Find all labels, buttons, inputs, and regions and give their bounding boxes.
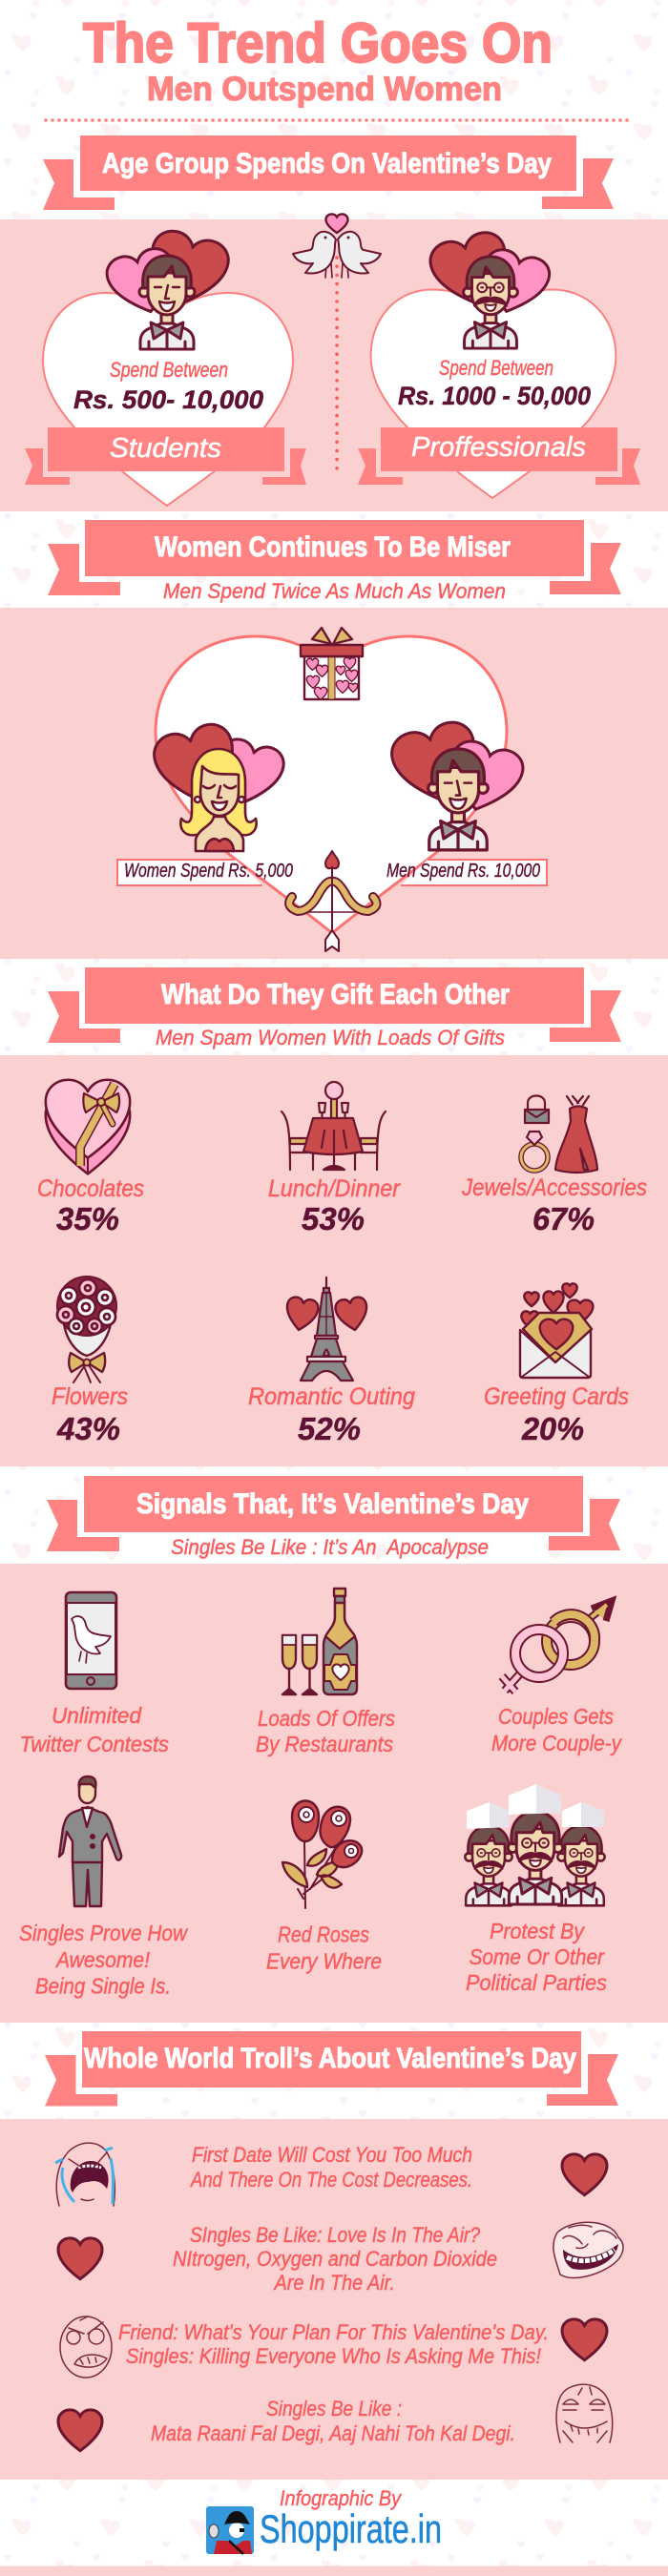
icon: bow and arrow xyxy=(289,851,377,951)
banner: gifts: What Do They Gift Each Other xyxy=(161,979,510,1010)
text: Friend: What's Your Plan For This Valentine's Day. xyxy=(118,2320,549,2344)
banner: gifts: Men Spam Women With Loads Of Gifts xyxy=(156,1026,505,1049)
banner: signals: Signals That, It’s Valentine’s Day xyxy=(136,1488,529,1520)
ribbon xyxy=(25,427,306,485)
joke 4 xyxy=(58,2384,613,2451)
big heart xyxy=(156,636,507,933)
caption: Protest By xyxy=(490,1919,585,1943)
joke 3 xyxy=(60,2316,607,2378)
banner: women miser: Men Spend Twice As Much As Women xyxy=(163,579,506,603)
value: 20% xyxy=(521,1411,584,1446)
text: And There On The Cost Decreases. xyxy=(189,2168,472,2192)
caption: Every Where xyxy=(266,1948,382,1973)
text xyxy=(189,2143,472,2192)
icon: young man with balloons xyxy=(103,226,233,349)
icon: three protesters xyxy=(465,1784,605,1905)
logo wordmark: Shoppirate.in xyxy=(260,2506,442,2551)
caption xyxy=(19,1703,169,1756)
panel: gifts xyxy=(0,1055,668,1466)
icon: woman with balloons xyxy=(150,719,287,851)
text: Singles: Killing Everyone Who Is Asking Me This! xyxy=(126,2344,541,2368)
item: flowers xyxy=(52,1277,128,1446)
banner: women miser xyxy=(48,520,621,603)
value: 35% xyxy=(56,1201,119,1236)
banner: signals: Singles Be Like : It’s An Apocalypse xyxy=(171,1535,489,1559)
text: First Date Will Cost You Too Much xyxy=(192,2143,472,2167)
caption xyxy=(266,1922,382,1973)
icon: bouquet xyxy=(57,1277,116,1382)
icon: red roses xyxy=(282,1801,362,1908)
caption: Awesome! xyxy=(54,1947,151,1972)
icon: crying face xyxy=(55,2143,115,2206)
label: men spend xyxy=(386,860,547,885)
item: chocolates xyxy=(37,1080,144,1236)
icon: troll face xyxy=(553,2222,623,2277)
panel: trolls xyxy=(0,2119,668,2480)
icon: heart box xyxy=(46,1080,130,1174)
label: Chocolates xyxy=(37,1175,144,1202)
icon: purse, ring and dress xyxy=(521,1095,597,1173)
item: twitter contests xyxy=(19,1592,169,1756)
label: Jewels/Accessories xyxy=(461,1174,647,1201)
caption xyxy=(19,1921,188,1998)
icon: love birds xyxy=(293,214,381,278)
banner: women miser: Women Continues To Be Miser xyxy=(155,531,511,563)
label: Flowers xyxy=(52,1383,128,1410)
value: 67% xyxy=(532,1201,595,1236)
icon: champagne bottle and glasses xyxy=(282,1589,357,1694)
text: SIngles Be Like: Love Is In The Air? xyxy=(190,2223,481,2247)
caption: Being Single Is. xyxy=(35,1973,171,1998)
icon: gift box xyxy=(301,628,363,699)
icon: heart xyxy=(58,2238,102,2279)
icon: envelope with hearts xyxy=(520,1283,593,1378)
item: singles xyxy=(19,1776,188,1998)
icon: eiffel tower with hearts xyxy=(283,1278,370,1381)
banner: trolls: Whole World Troll’s About Valentine’s Day xyxy=(84,2043,576,2074)
panel: header title xyxy=(83,12,553,108)
caption: Political Parties xyxy=(466,1970,607,1995)
logo: pirate xyxy=(206,2506,254,2554)
item: jewels xyxy=(461,1095,647,1236)
card: professionals xyxy=(358,228,640,498)
icon: man with balloons xyxy=(387,717,527,850)
label: women spend: Women Spend Rs. 5,000 xyxy=(124,861,293,882)
value: Rs. 1000 - 50,000 xyxy=(398,382,591,410)
title: The Trend Goes On xyxy=(83,12,553,74)
caption: Singles Prove How xyxy=(19,1921,188,1945)
text: Mata Raani Fal Degi, Aaj Nahi Toh Kal Degi. xyxy=(151,2421,515,2445)
caption xyxy=(491,1704,622,1755)
item: romantic outing xyxy=(248,1278,415,1446)
value: 43% xyxy=(56,1411,120,1446)
ribbon: Proffessionals xyxy=(411,432,586,463)
caption: Red Roses xyxy=(278,1922,369,1946)
item: lunch/dinner xyxy=(268,1082,402,1236)
icon: heart xyxy=(562,2154,607,2195)
text: NItrogen, Oxygen and Carbon Dioxide xyxy=(173,2247,497,2271)
divider: dotted line xyxy=(335,258,339,469)
icon: rage face xyxy=(60,2316,112,2378)
caption: By Restaurants xyxy=(256,1732,393,1756)
panel: signals xyxy=(0,1564,668,2023)
card: students xyxy=(25,226,306,506)
label: women spend xyxy=(117,860,293,885)
item: greeting cards xyxy=(484,1283,629,1446)
text: Singles Be Like : xyxy=(266,2397,402,2420)
item: offers xyxy=(256,1589,395,1756)
icon: heart xyxy=(58,2410,102,2451)
icon: dinner table xyxy=(282,1082,386,1170)
banner: trolls xyxy=(45,2031,618,2107)
caption: More Couple-y xyxy=(491,1731,622,1755)
item: protest xyxy=(465,1784,607,1995)
caption: Couples Gets xyxy=(498,1704,614,1729)
heart card xyxy=(371,289,616,498)
heart card xyxy=(43,293,293,506)
item: couple xyxy=(491,1601,622,1755)
caption: Unlimited xyxy=(52,1703,142,1728)
ribbon xyxy=(358,427,640,485)
icon: man in suit xyxy=(59,1776,121,1906)
item: roses xyxy=(266,1801,382,1973)
label: Spend Between xyxy=(439,356,553,380)
icon: gender symbols xyxy=(502,1601,612,1692)
label: Lunch/Dinner xyxy=(268,1175,402,1202)
ribbon: Students xyxy=(110,433,221,464)
banner: gifts xyxy=(48,967,621,1049)
caption: Twitter Contests xyxy=(19,1732,169,1756)
panel: spending comparison xyxy=(0,608,668,959)
banner: age group: Age Group Spends On Valentine’s Day xyxy=(102,148,552,179)
icon: phone with bird xyxy=(66,1592,116,1689)
text xyxy=(151,2397,515,2445)
caption: Some Or Other xyxy=(470,1944,605,1969)
panel: age groups xyxy=(0,214,668,511)
label: men spend: Men Spend Rs. 10,000 xyxy=(386,861,540,882)
icon: man with moustache and balloons xyxy=(426,228,553,348)
label: Spend Between xyxy=(110,358,228,382)
value: 52% xyxy=(298,1411,361,1446)
credit label: Infographic By xyxy=(280,2486,403,2510)
joke 2 xyxy=(58,2222,623,2295)
caption xyxy=(466,1919,607,1995)
text xyxy=(118,2320,549,2368)
joke 1 xyxy=(55,2143,607,2206)
caption: Loads Of Offers xyxy=(258,1706,395,1731)
icon: laughing face xyxy=(556,2384,613,2442)
text xyxy=(173,2223,497,2295)
subtitle: Men Outspend Women xyxy=(147,71,502,108)
label: Greeting Cards xyxy=(484,1383,629,1410)
banner: signals xyxy=(47,1476,620,1559)
value: Rs. 500- 10,000 xyxy=(73,385,263,414)
text: Are In The Air. xyxy=(273,2271,395,2295)
caption xyxy=(256,1706,395,1756)
banner: age group xyxy=(43,135,614,210)
panel: footer credit xyxy=(206,2486,442,2554)
value: 53% xyxy=(302,1201,365,1236)
label: Romantic Outing xyxy=(248,1383,415,1410)
icon: heart xyxy=(562,2319,607,2360)
